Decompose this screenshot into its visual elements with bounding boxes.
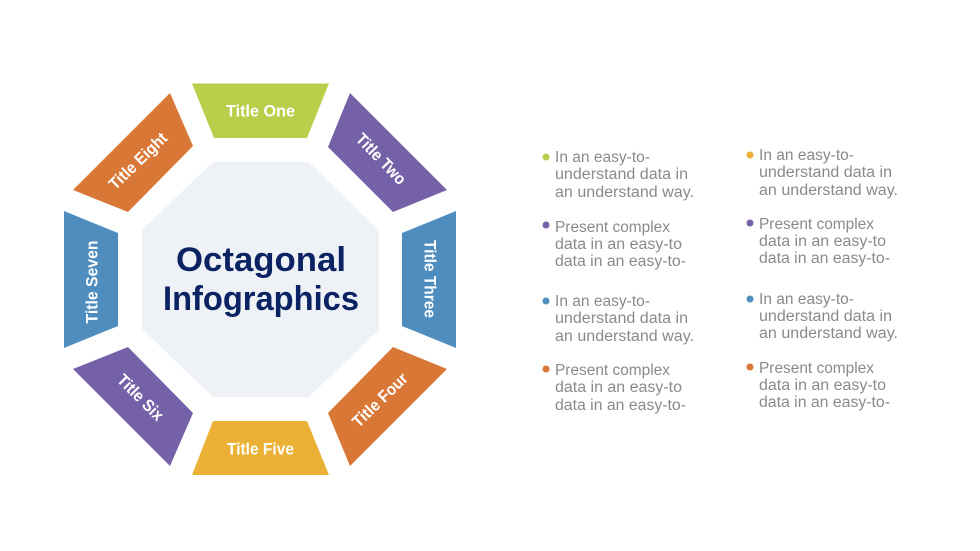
segment: Title Eight bbox=[73, 93, 193, 212]
bullet: right column yellow: understand data in bbox=[759, 164, 892, 181]
bullet: left column orange: data in an easy-to bbox=[555, 379, 682, 396]
bullet: right column orange: data in an easy-to- bbox=[759, 394, 890, 411]
segment: Title Four: Title Four bbox=[349, 369, 412, 431]
bullet: left column purple: data in an easy-to bbox=[555, 236, 682, 253]
bullet: left column orange: data in an easy-to- bbox=[555, 397, 686, 414]
segment: Title One bbox=[192, 84, 329, 138]
bullet: right column blue: In an easy-to- bbox=[759, 291, 854, 308]
segment: Title Two bbox=[328, 93, 447, 212]
bullet: left column blue bbox=[542, 293, 694, 345]
bullet: right column purple: data in an easy-to- bbox=[759, 250, 890, 267]
bullet: right column orange bbox=[746, 360, 890, 411]
segment: Title Two: Title Two bbox=[352, 130, 409, 189]
segment: Title Three bbox=[402, 211, 456, 348]
heading: Octagonal Infographics: Octagonal bbox=[176, 241, 346, 279]
segment: Title Five: Title Five bbox=[227, 440, 294, 458]
bullet: right column yellow bbox=[746, 147, 898, 199]
bullet: left column orange: Present complex bbox=[555, 362, 670, 379]
bullet: right column yellow: an understand way. bbox=[759, 182, 898, 199]
bullet: left column purple: data in an easy-to- bbox=[555, 253, 686, 270]
segment: Title Six: Title Six bbox=[113, 371, 168, 425]
segment: Title Four bbox=[328, 347, 447, 466]
heading: Octagonal Infographics bbox=[163, 241, 359, 318]
bullet: left column green bbox=[542, 149, 694, 201]
bullet: left column green: an understand way. bbox=[555, 184, 694, 201]
segment: Title One: Title One bbox=[226, 102, 295, 120]
segment: Title Seven: Title Seven bbox=[84, 240, 102, 324]
segment: Title Eight: Title Eight bbox=[105, 129, 172, 194]
bullet: left column orange bbox=[542, 362, 686, 414]
bullet: left column purple: Present complex bbox=[555, 219, 670, 236]
bullet: right column blue: understand data in bbox=[759, 308, 892, 325]
bullet: left column green: understand data in bbox=[555, 166, 688, 183]
bullet: right column blue bbox=[746, 291, 898, 342]
bullet: left column green: In an easy-to- bbox=[555, 149, 650, 166]
bullet: left column blue: In an easy-to- bbox=[555, 293, 650, 310]
segment: Title Five bbox=[192, 421, 329, 475]
heading: Octagonal Infographics: Infographics bbox=[163, 280, 359, 318]
segment: Title Six bbox=[73, 347, 193, 466]
bullet: right column purple: Present complex bbox=[759, 216, 874, 233]
bullet: right column orange: Present complex bbox=[759, 360, 874, 377]
bullet: right column blue: an understand way. bbox=[759, 325, 898, 342]
segment: Title Three: Title Three bbox=[420, 240, 438, 318]
bullet: left column blue: understand data in bbox=[555, 310, 688, 327]
bullet: left column purple bbox=[542, 219, 686, 270]
bullet: right column purple bbox=[746, 216, 890, 267]
bullet: right column orange: data in an easy-to bbox=[759, 377, 886, 394]
segment: Title Seven bbox=[64, 211, 118, 348]
bullet: right column yellow: In an easy-to- bbox=[759, 147, 854, 164]
bullet: right column purple: data in an easy-to bbox=[759, 233, 886, 250]
bullet: left column blue: an understand way. bbox=[555, 328, 694, 345]
panel: central octagon bbox=[142, 162, 379, 397]
